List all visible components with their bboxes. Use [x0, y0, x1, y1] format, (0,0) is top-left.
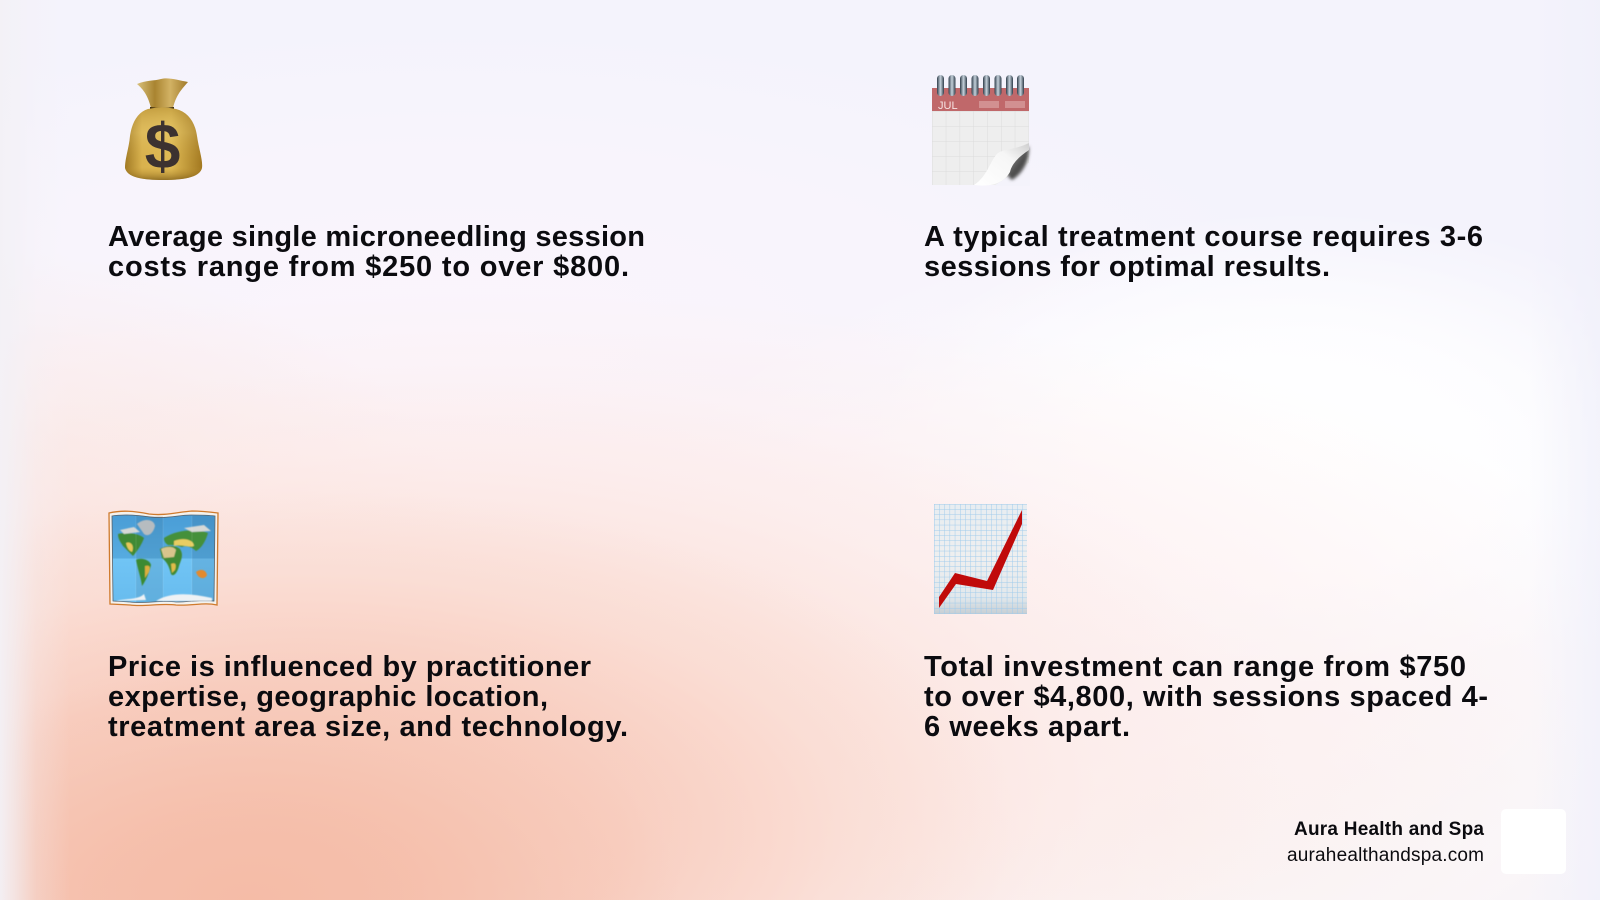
calendar month label: JUL	[938, 100, 958, 112]
footer brand text	[1287, 819, 1484, 866]
card text: total investment: 6 weeks apart.	[924, 711, 1130, 743]
footer logo placeholder	[1501, 809, 1566, 874]
footer brand text: aurahealthandspa.com	[1287, 845, 1484, 866]
card text: session cost: Average single microneedling session	[108, 221, 645, 253]
footer brand text: Aura Health and Spa	[1294, 819, 1484, 840]
card text: price factors	[108, 651, 628, 743]
card text: total investment: Total investment can range from $750	[924, 651, 1466, 683]
icon: money bag	[125, 78, 202, 182]
card text: price factors: expertise, geographic location,	[108, 681, 548, 713]
card text: total investment: to over $4,800, with sessions spaced 4-	[924, 681, 1488, 713]
card text: course length: sessions for optimal results.	[924, 251, 1330, 283]
icon: rising chart	[934, 504, 1027, 614]
card text: course length: A typical treatment course requires 3-6	[924, 221, 1483, 253]
card text: price factors: Price is influenced by practitioner	[108, 651, 591, 683]
icon: calendar	[932, 75, 1030, 186]
card text: price factors: treatment area size, and technology.	[108, 711, 628, 743]
icon glyph: dollar sign: $	[145, 110, 180, 182]
card text: session cost: costs range from $250 to over $800.	[108, 251, 629, 283]
card text: total investment	[924, 651, 1488, 743]
card text: session cost	[108, 221, 645, 283]
icon: world map	[109, 511, 218, 606]
card text: course length	[924, 221, 1483, 283]
